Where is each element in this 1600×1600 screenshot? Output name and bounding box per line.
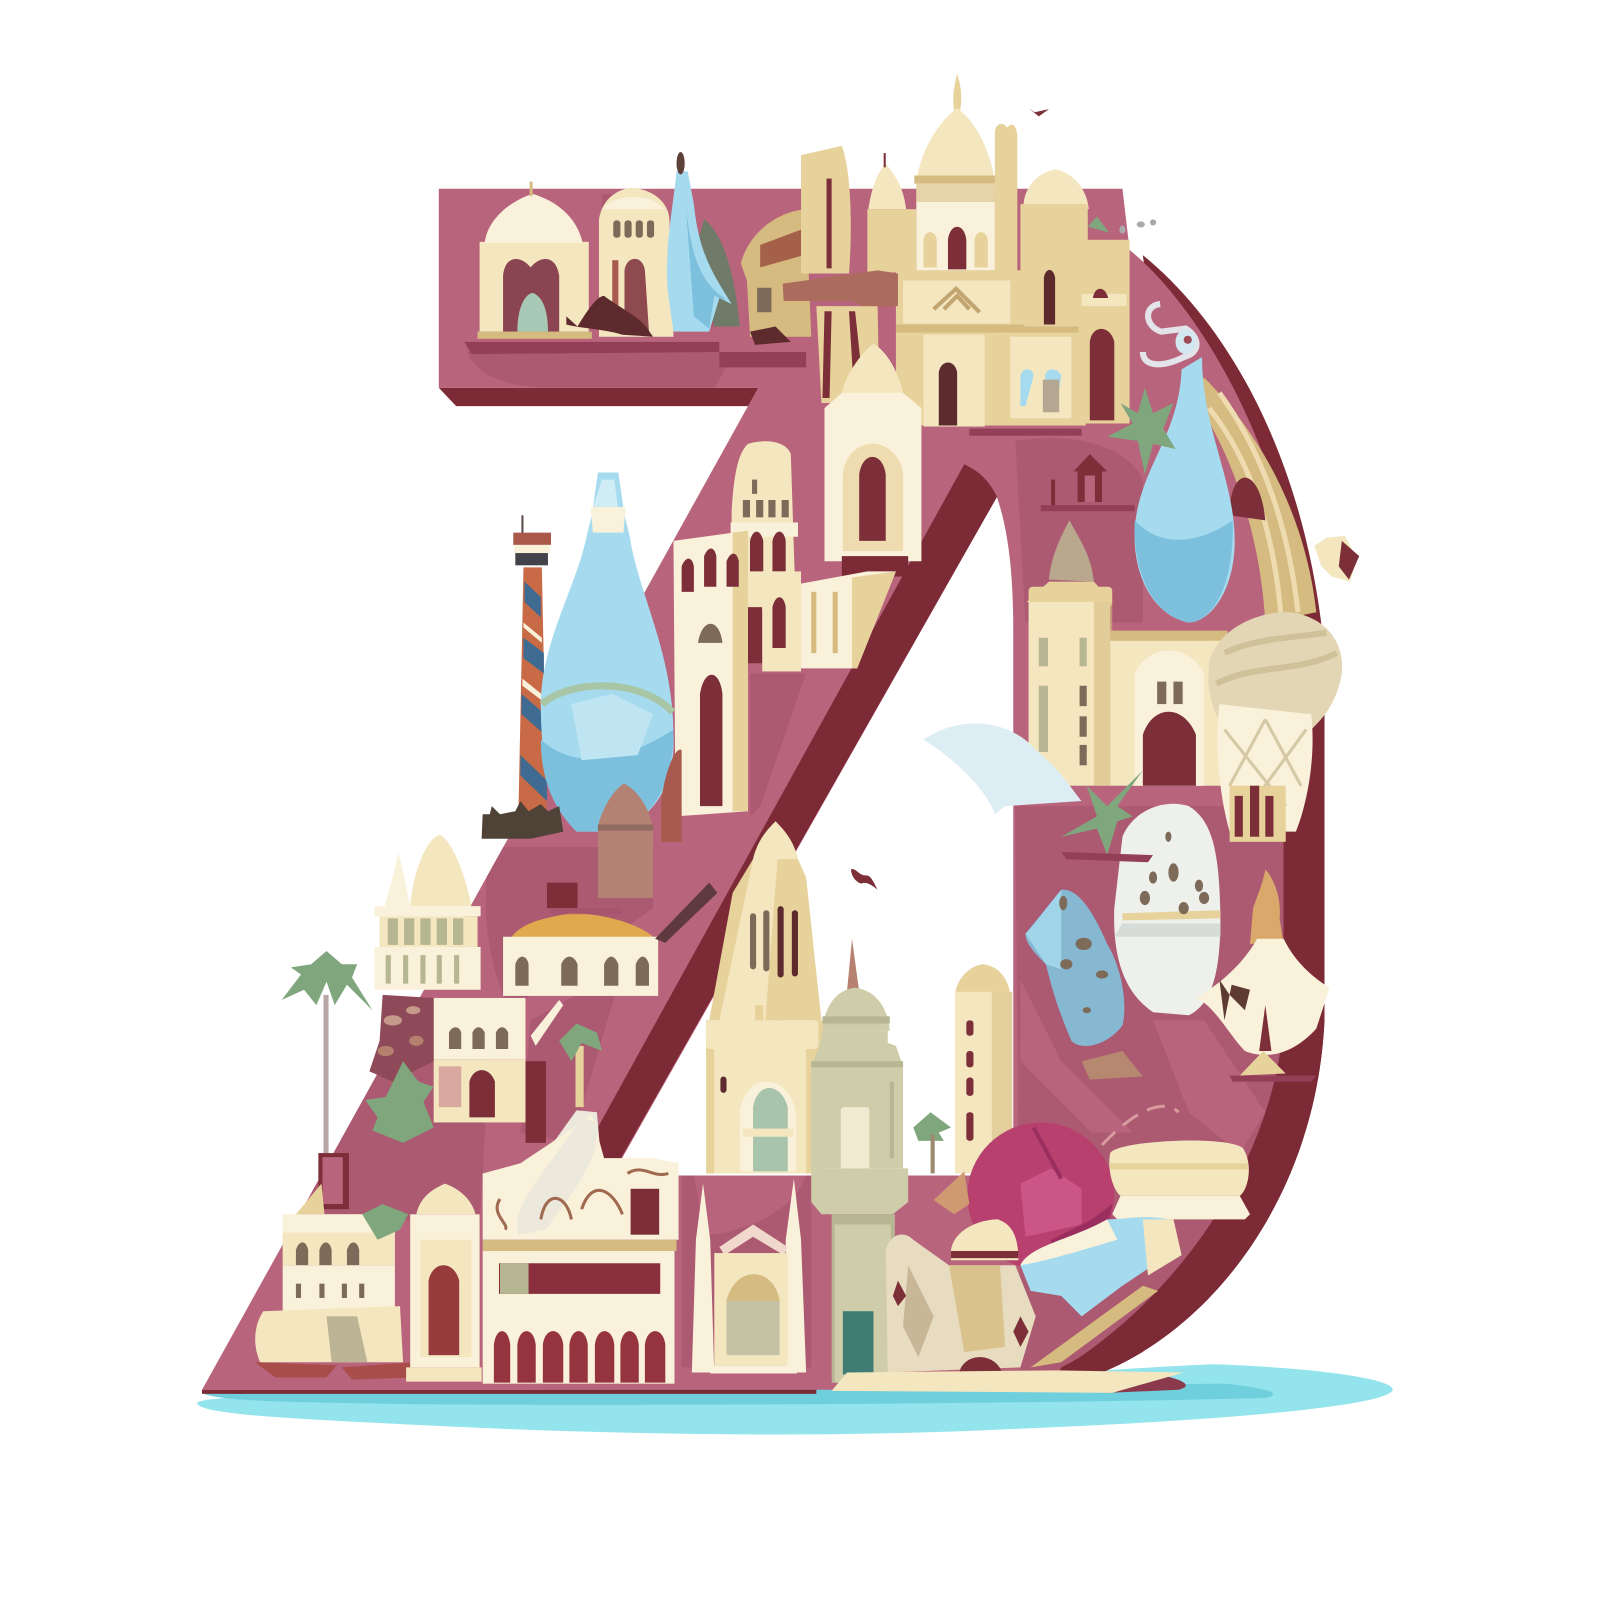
dark red frame tower: [296, 1153, 349, 1214]
central tall tower: [706, 821, 823, 1173]
foliage cluster: [365, 1061, 434, 1143]
temple facade with door: [916, 184, 995, 270]
small white church: [692, 1179, 806, 1373]
colosseum ruin: [741, 209, 811, 345]
domed shrine with red door: [406, 1184, 482, 1382]
blue bottle dome: [541, 472, 674, 832]
crenellated base of column: [482, 801, 563, 839]
magenta sphere: [967, 1122, 1114, 1269]
ribbed shell dome: [1208, 612, 1342, 832]
tall palm: [282, 951, 372, 1153]
peacock head curl: [1143, 304, 1197, 364]
arcade with red arches: [483, 1240, 677, 1384]
stepped beige tower cluster: [673, 441, 896, 816]
white drape column: [510, 1110, 600, 1224]
rear tall tower: [731, 441, 798, 663]
building: dome pavilion: [478, 182, 592, 339]
right dome: [1020, 169, 1089, 278]
right minaret: [995, 124, 1017, 276]
small right tower: [955, 964, 1012, 1173]
rope arc: [1102, 1106, 1179, 1145]
right pale block: [801, 571, 896, 668]
building: small tower with windows: [599, 188, 673, 337]
capitol building: [374, 835, 481, 990]
mauve domed tower: [598, 750, 682, 898]
mushroom cap: [951, 1219, 1018, 1260]
arched gateway building: [1110, 631, 1228, 786]
small palm on wall: [559, 1023, 602, 1107]
face shading: [306, 194, 1284, 1372]
water pool: [197, 1364, 1393, 1434]
right cream fragments: [1314, 536, 1359, 582]
golden roof palace: [503, 883, 658, 996]
numeral face: [202, 189, 1324, 1394]
dark slipper shape: [566, 296, 653, 337]
peacock body: [1135, 357, 1235, 622]
small tree: [913, 1112, 951, 1173]
olive stone tower: [811, 939, 908, 1383]
blue speckled stone: [1026, 890, 1124, 1046]
small blue flecks: [1088, 216, 1156, 234]
peacock tail band: [1194, 378, 1316, 622]
small foliage on terrace: [362, 1204, 408, 1240]
domed bell tower: [1027, 520, 1112, 786]
ledge: [1061, 852, 1153, 862]
gothic cream tower: [824, 344, 921, 577]
palm beside peacock: [1107, 388, 1176, 474]
carved white spire cluster: [886, 1234, 1036, 1372]
small arcade right: [1230, 786, 1286, 842]
numeral extruded outer side: [439, 255, 1324, 1372]
small bird top: [1029, 108, 1049, 116]
stone boat base: [832, 1370, 1184, 1393]
stacked cream cake: [1109, 1140, 1250, 1219]
white feather: [923, 723, 1082, 814]
dark dagger on band: [655, 883, 717, 943]
brown beam: [783, 270, 898, 306]
lower temple tier: [896, 270, 1086, 427]
patterned arch tower: [1024, 247, 1084, 327]
rocky red rubble: [369, 995, 434, 1082]
small figure on ledge under stone: [1082, 1051, 1143, 1080]
small left dome: [867, 153, 916, 272]
lower left terraced building: [255, 1214, 413, 1380]
big temple complex: [867, 73, 1130, 436]
lower middle block: [762, 571, 801, 671]
peacock: [1135, 304, 1316, 622]
blue robed figure: [667, 152, 732, 332]
ornate carved frieze: [483, 1114, 679, 1240]
dancer in cream dress: [1196, 869, 1330, 1082]
orange roof: [934, 1171, 969, 1214]
left block with long arch: [673, 531, 748, 816]
tall pillar: [801, 146, 880, 403]
striped column tower: [513, 515, 551, 816]
white blue animal: [1020, 1217, 1182, 1367]
white speckled stone: [1114, 804, 1220, 1015]
main dome and finial: [914, 73, 996, 184]
top bar shelf ledge: [464, 342, 806, 367]
teal green backdrop: [694, 219, 740, 327]
right narrow tower: [1079, 240, 1130, 423]
small bird center: [851, 869, 878, 890]
small palace block: [434, 998, 563, 1143]
small red house: [1041, 454, 1135, 511]
green palm: [1061, 770, 1143, 855]
